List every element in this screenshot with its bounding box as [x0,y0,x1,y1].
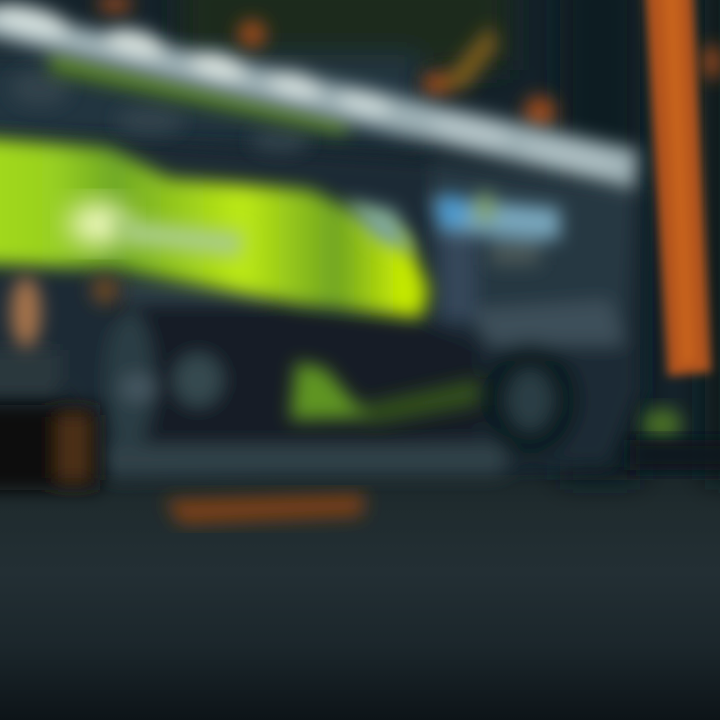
lime green side panel [0,136,430,318]
glow spot on the panel [68,202,128,246]
orange ground reflection [165,494,365,524]
vertical orange pillar [644,0,711,376]
floor [0,475,720,720]
blue cab window [432,192,560,265]
orange background splashes [97,0,720,128]
lower green patch [290,362,480,425]
pale highlight above the panel's right end [345,200,415,255]
truck upper panel detail [10,70,310,152]
pale streak across the lime panel [110,218,245,258]
dark right lower block [630,440,720,470]
background: upper wall details [0,0,720,480]
small green light at right [642,408,682,440]
truck body [0,130,640,480]
white roof band [0,0,638,190]
green strip under roof [50,50,350,135]
left orange figure [0,276,119,490]
